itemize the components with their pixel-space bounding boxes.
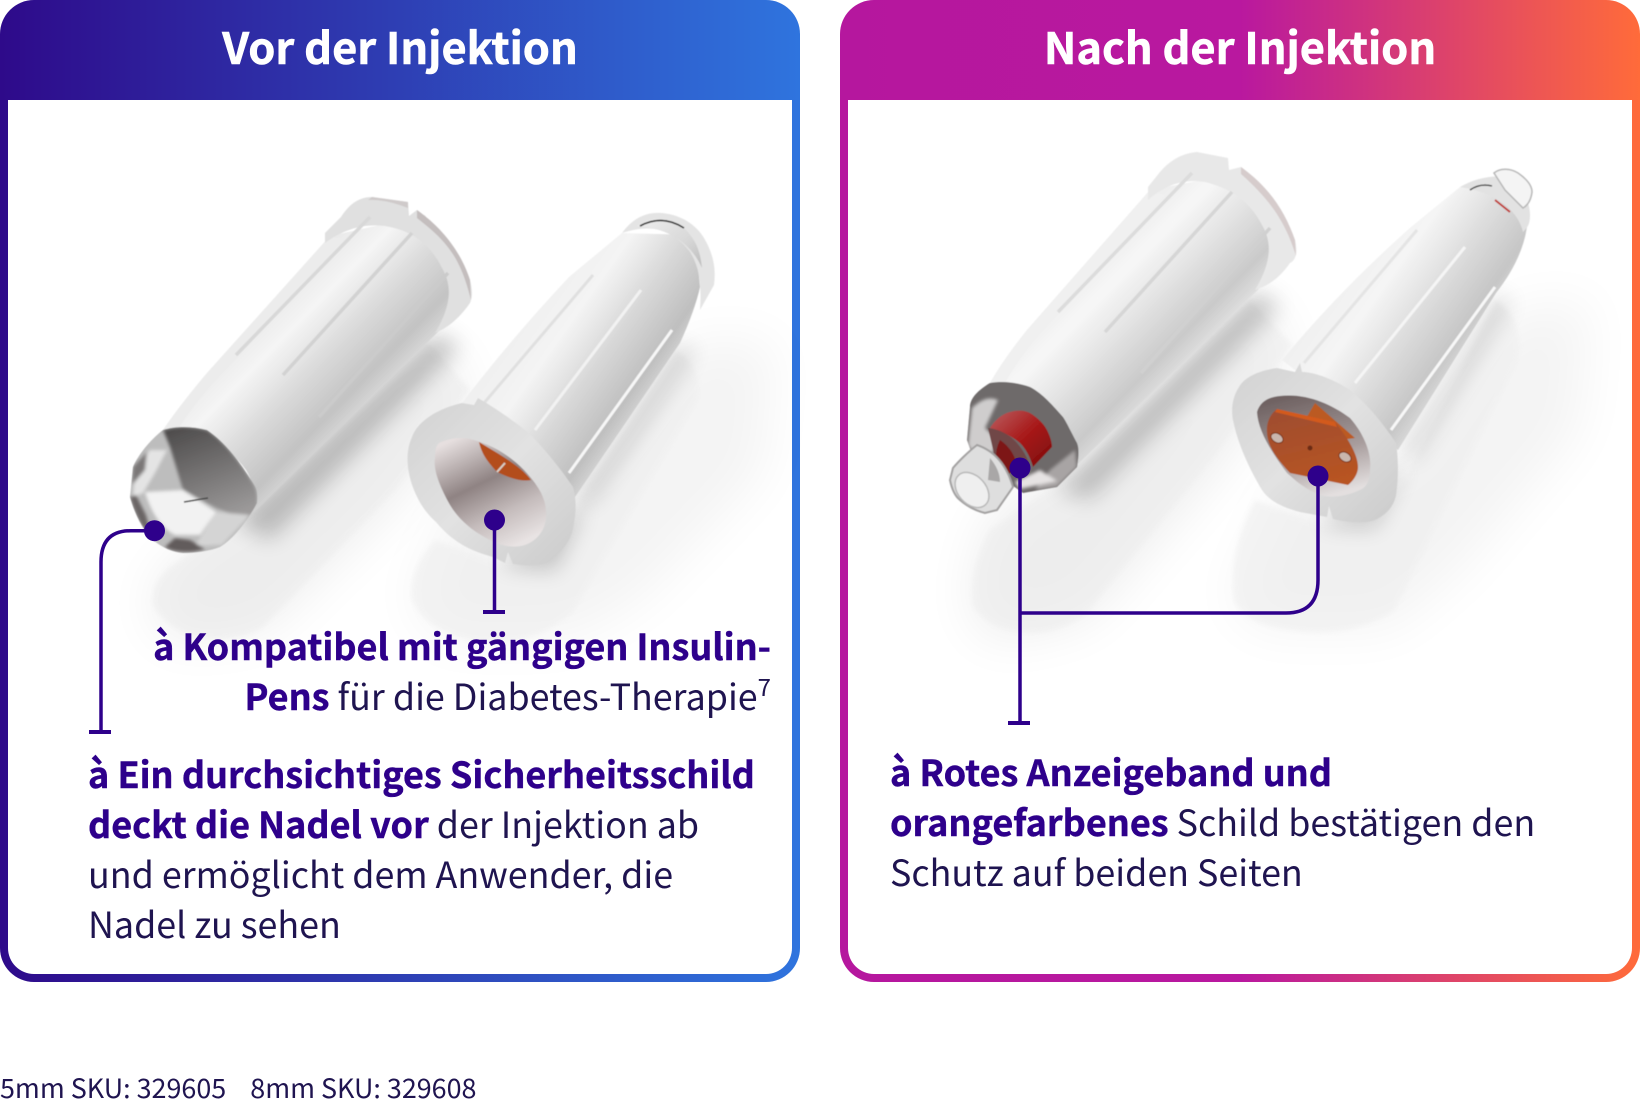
device: used hub end with orange shield, after injection (1232, 169, 1532, 522)
text: indicator note: Schutz auf beiden Seiten (890, 845, 1303, 897)
text: indicator note (890, 745, 1535, 897)
product illustrations and leader lines (89, 152, 1568, 734)
leader line: transparent shield callout (89, 520, 165, 734)
device: capped hub end, before injection (408, 213, 715, 565)
panel: before injection (0, 0, 800, 982)
shadows: right panel (970, 292, 1590, 640)
text: transparent shield note: Nadel zu sehen (88, 897, 341, 949)
text: transparent shield note (88, 747, 755, 949)
text: compatibility note (153, 619, 771, 721)
text: compatibility note: à Kompatibel mit gängigen Insulin- (153, 619, 771, 671)
text: transparent shield note: deckt die Nadel vor der Injektion ab (88, 797, 699, 849)
text: transparent shield note: à Ein durchsichtiges Sicherheitsschild (88, 747, 755, 799)
heading: after injection: Nach der Injektion (1044, 15, 1436, 77)
shadows: left panel (150, 335, 775, 642)
device: used needle with red band, after injection (948, 152, 1296, 514)
device: capped needle, before injection (130, 197, 472, 553)
text: transparent shield note: und ermöglicht dem Anwender, die (88, 847, 673, 899)
text: indicator note: à Rotes Anzeigeband und (890, 745, 1332, 797)
leader lines: indicator band and orange shield callout (1008, 458, 1328, 725)
heading: before injection: Vor der Injektion (222, 15, 578, 77)
panel: after injection (840, 0, 1640, 982)
text: indicator note: orangefarbenes Schild bestätigen den (890, 795, 1535, 847)
text: SKU numbers: 5mm SKU: 329605 8mm SKU: 329608 (0, 1067, 476, 1106)
leader line: compatibility callout (483, 510, 505, 614)
text: compatibility note: Pens für die Diabetes-Therapie7 (245, 668, 771, 721)
